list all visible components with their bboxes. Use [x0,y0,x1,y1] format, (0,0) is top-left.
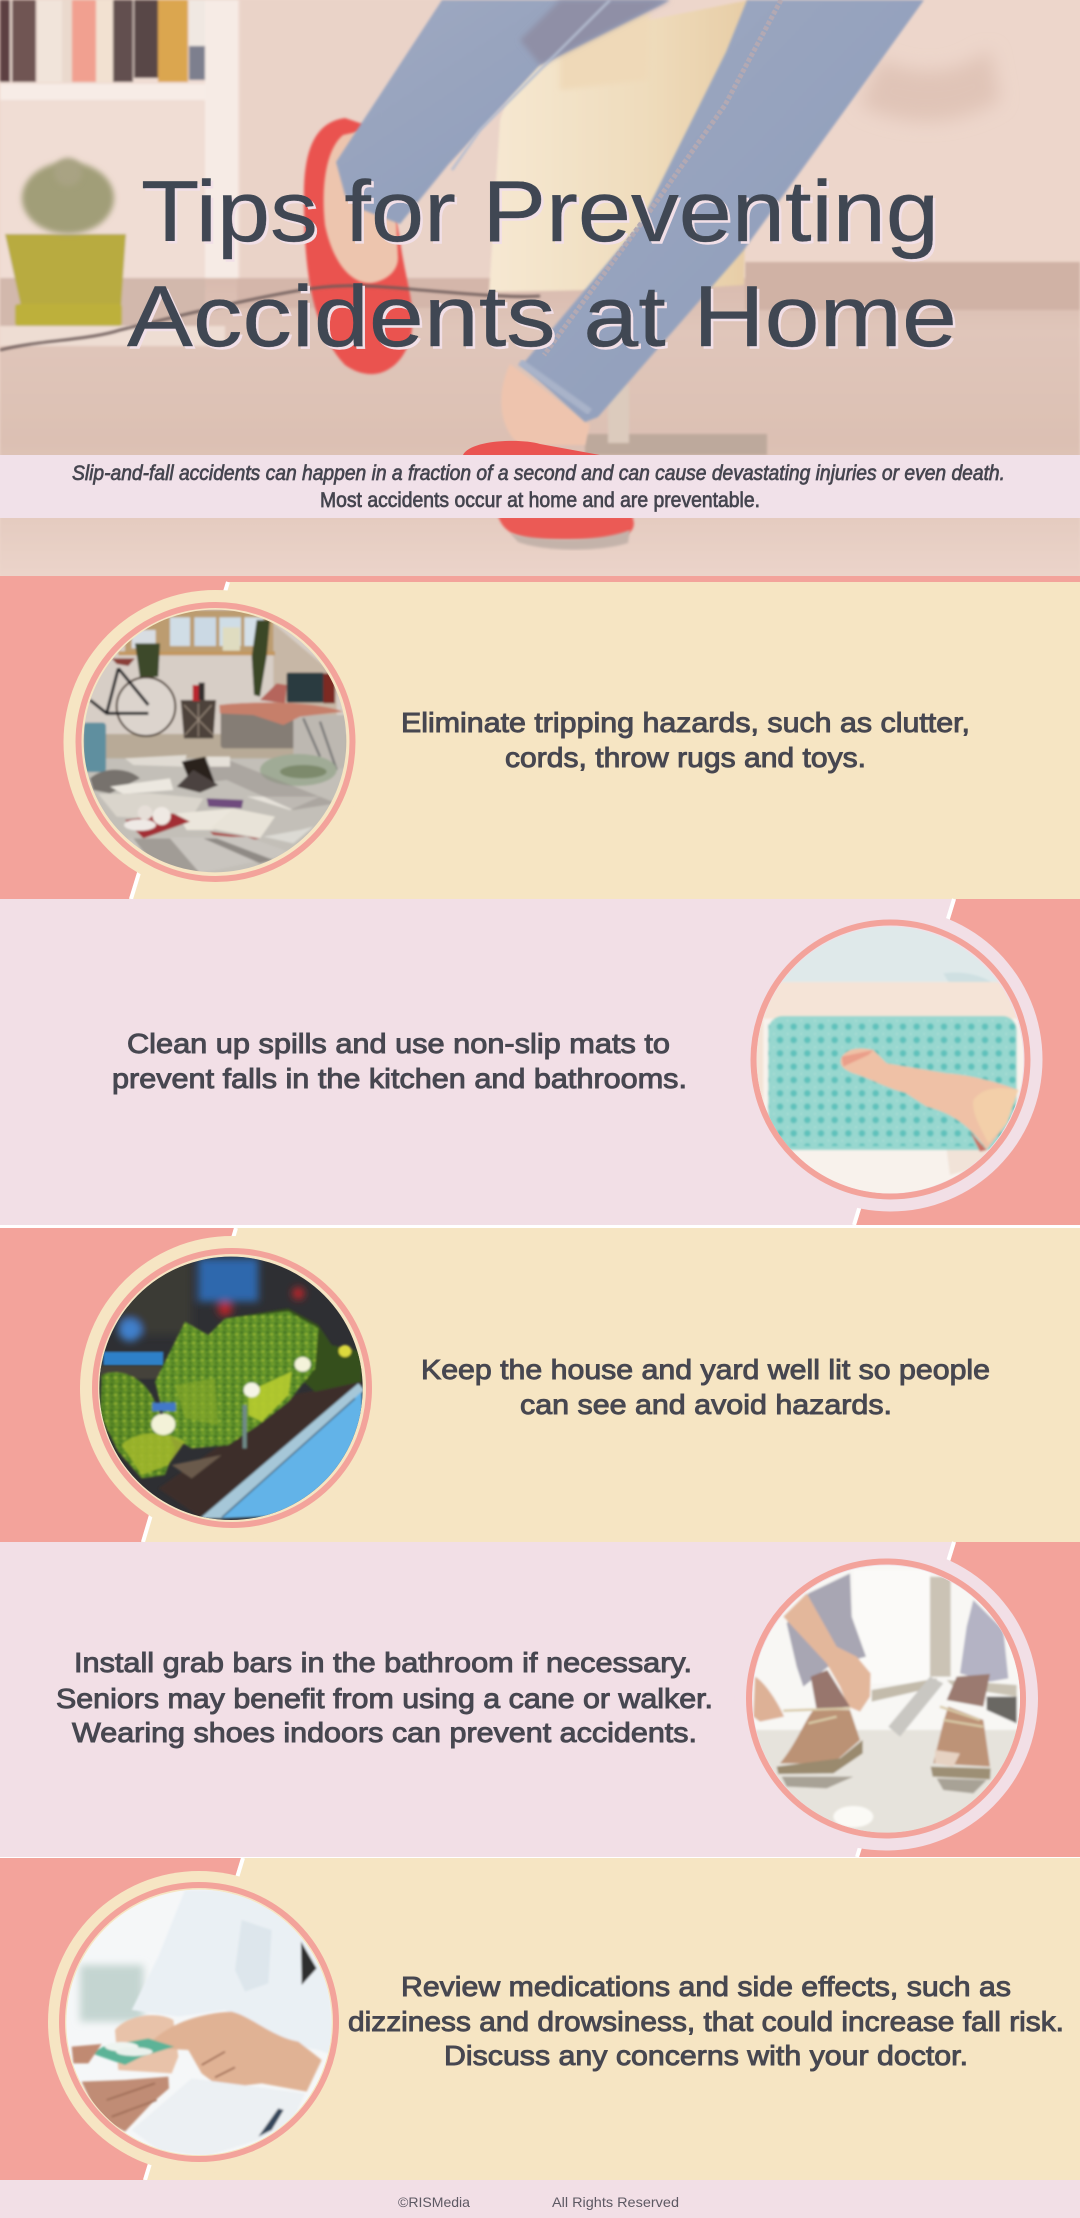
tip 1 text: cords, throw rugs and toys. [505,742,866,773]
footer: ©RISMedia [398,2194,470,2210]
tip 4 text [56,1647,713,1748]
tip 4 text: Install grab bars in the bathroom if necessary. [74,1647,692,1678]
tip 4 text: Seniors may benefit from using a cane or walker. [56,1683,713,1714]
jeans [336,0,670,224]
panel: tip 1 tripping hazards [0,576,1080,899]
intro text line 1: Slip-and-fall accidents can happen in a fraction of a second and can cause devastating injuries or even death. [72,462,1005,485]
intro text line 2: Most accidents occur at home and are preventable. [320,489,760,512]
photo: doctor handing pills [66,1890,332,2155]
tip 2 text: Clean up spills and use non-slip mats to [127,1028,670,1059]
hero photo: person tripping over a cord [0,0,1080,576]
photo: person tying shoes [752,1566,1020,1833]
stand [584,394,768,455]
photo: cluttered living room [84,610,346,872]
tip 1 text [401,707,970,773]
tip 2 text: prevent falls in the kitchen and bathrooms. [112,1063,687,1094]
cord [0,286,540,350]
tip 2 text [112,1028,687,1094]
intro band [0,455,1080,518]
photo: foot on bath mat [756,926,1024,1194]
title: Accidents at Home [127,269,957,365]
tip 5 text: dizziness and drowsiness, that could increase fall risk. [348,2006,1064,2037]
slipper [304,118,413,374]
title: Tips for Preventing [141,164,939,260]
panel: tip 5 medications [0,1858,1080,2180]
panel: tip 4 grab bars and shoes [0,1542,1080,1857]
tip 3 text: can see and avoid hazards. [520,1389,892,1420]
title [127,164,957,365]
tip 4 text: Wearing shoes indoors can prevent accidents. [72,1717,697,1748]
foot and lower slipper [501,364,590,445]
tip 3 text [421,1354,990,1420]
tip 5 text: Discuss any concerns with your doctor. [444,2040,968,2071]
footer [0,2180,1080,2218]
panel: tip 2 spills and mats [113,898,1080,1225]
panel: tip 3 lighting [0,1228,1080,1542]
footer: All Rights Reserved [552,2194,679,2210]
photo: garden path lights at night [99,1256,363,1520]
tip 5 text: Review medications and side effects, such as [401,1971,1011,2002]
tip 5 text [348,1971,1064,2071]
tip 1 text: Eliminate tripping hazards, such as clutter, [401,707,970,738]
tip 3 text: Keep the house and yard well lit so people [421,1354,990,1385]
